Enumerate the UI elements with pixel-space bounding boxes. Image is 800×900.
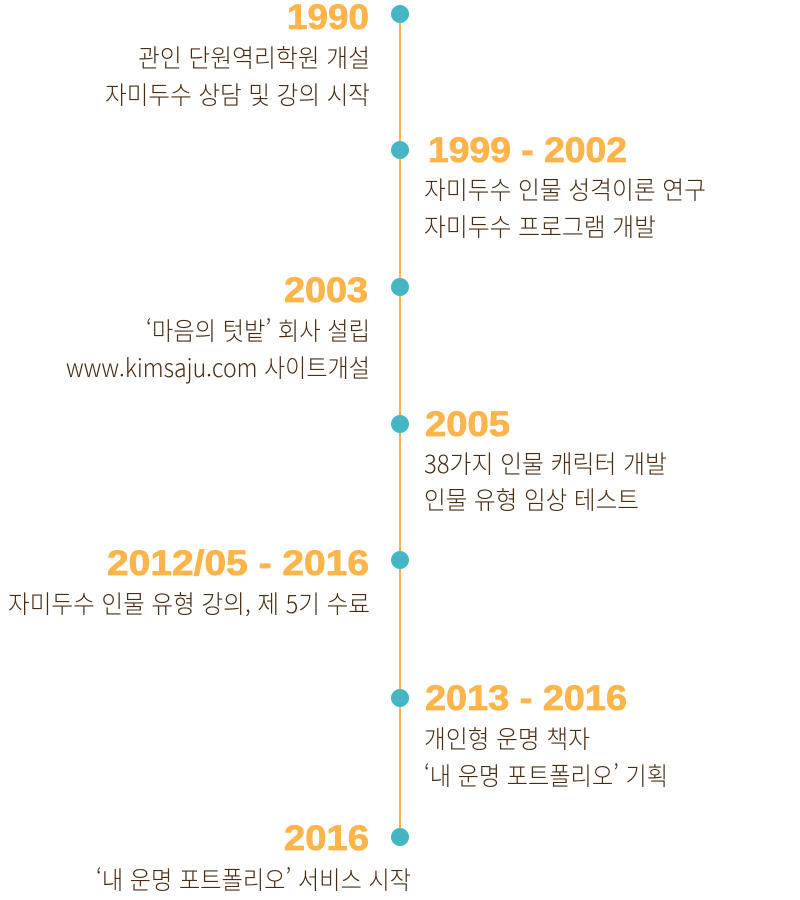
description: www.kimsaju.com 사이트개설 bbox=[66, 349, 370, 385]
year heading: 2005 bbox=[425, 405, 510, 444]
description bbox=[424, 445, 667, 517]
description: 관인 단원역리학원 개설 bbox=[138, 39, 370, 75]
description: 개인형 운명 책자 bbox=[424, 720, 590, 756]
marker dot bbox=[391, 415, 409, 433]
marker dot bbox=[391, 689, 409, 707]
milestone 2013 - 2016 bbox=[391, 679, 668, 793]
description: ‘내 운명 포트폴리오’ 기획 bbox=[424, 757, 668, 793]
year heading: 2013 - 2016 bbox=[425, 679, 627, 718]
description: 자미두수 상담 및 강의 시작 bbox=[105, 76, 370, 112]
description: ‘마음의 텃밭’ 회사 설립 bbox=[146, 312, 370, 348]
marker dot bbox=[391, 5, 409, 23]
description: 38가지 인물 캐릭터 개발 bbox=[424, 445, 667, 481]
year heading: 1999 - 2002 bbox=[428, 131, 627, 170]
description: 자미두수 인물 유형 강의, 제 5기 수료 bbox=[8, 585, 370, 621]
marker dot bbox=[391, 828, 409, 846]
milestone 2005 bbox=[391, 405, 667, 517]
milestone 1999 - 2002 bbox=[391, 131, 706, 244]
description: 자미두수 프로그램 개발 bbox=[424, 208, 656, 244]
description bbox=[105, 39, 370, 112]
milestone 1990 bbox=[105, 0, 409, 112]
description bbox=[424, 720, 668, 793]
description bbox=[66, 312, 370, 385]
marker dot bbox=[391, 278, 409, 296]
description bbox=[424, 171, 706, 244]
description: 자미두수 인물 성격이론 연구 bbox=[424, 171, 706, 207]
marker dot bbox=[391, 551, 409, 569]
milestone 2016 bbox=[96, 819, 411, 897]
timeline vertical line bbox=[399, 14, 401, 837]
year heading: 2012/05 - 2016 bbox=[107, 544, 369, 583]
description: ‘내 운명 포트폴리오’ 서비스 시작 bbox=[96, 861, 411, 897]
description: 인물 유형 임상 테스트 bbox=[424, 481, 639, 517]
marker dot bbox=[391, 141, 409, 159]
milestone 2003 bbox=[66, 271, 409, 385]
year heading: 2003 bbox=[284, 271, 368, 310]
year heading: 2016 bbox=[284, 819, 369, 858]
milestone 2012/05 - 2016 bbox=[8, 544, 409, 621]
